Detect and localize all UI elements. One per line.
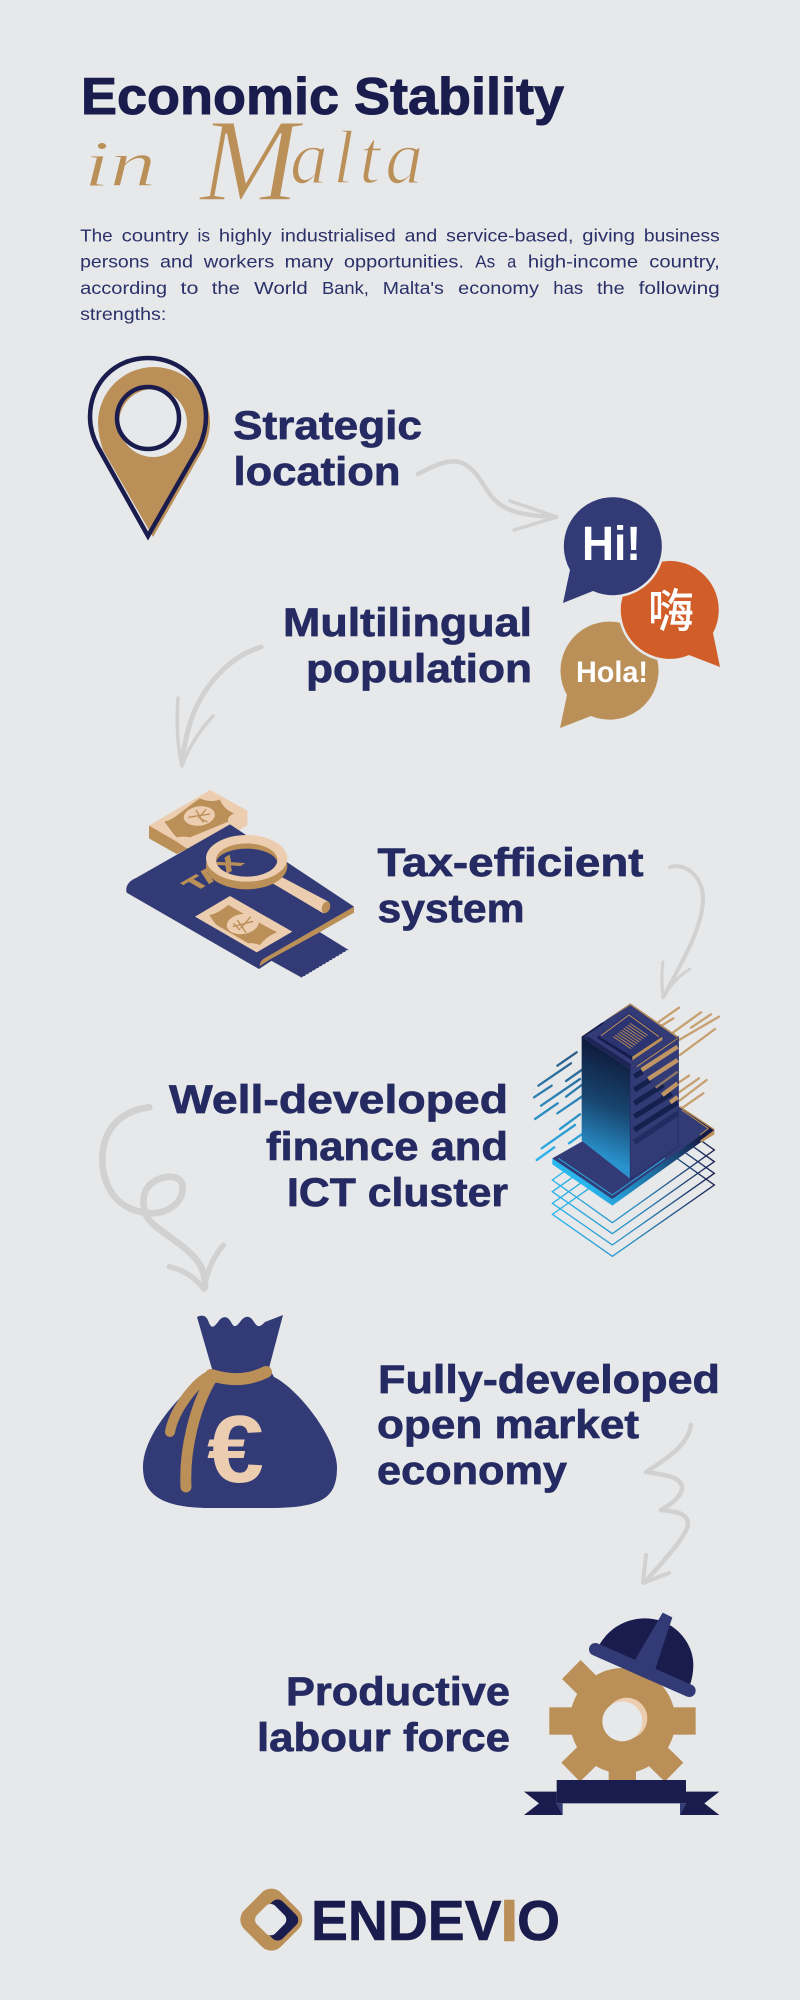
tower right face	[630, 1037, 678, 1179]
tower stripes	[634, 1072, 678, 1142]
base platform	[552, 1107, 714, 1206]
euro sign: €	[207, 1396, 264, 1503]
intro paragraph: and	[160, 252, 193, 272]
heading: Productive labour force: labour force	[257, 1716, 510, 1760]
subtitle: in Malta	[84, 95, 428, 226]
heading: Well-developed finance and ICT cluster: finance and	[266, 1125, 508, 1169]
intro paragraph: opportunities.	[344, 252, 464, 272]
bubble: Hi!	[563, 497, 662, 603]
heading: Fully-developed open market economy	[377, 1358, 720, 1493]
heading: Well-developed finance and ICT cluster	[169, 1078, 508, 1215]
intro paragraph: persons	[80, 252, 150, 272]
gold data streaks	[659, 1008, 719, 1108]
icon: server tower	[534, 1003, 719, 1256]
intro paragraph: according	[80, 278, 167, 298]
intro paragraph	[80, 226, 720, 324]
heading: Fully-developed open market economy: Fully-developed	[378, 1358, 720, 1402]
tower left face	[582, 1037, 630, 1179]
layered line diamonds	[552, 1107, 714, 1256]
heading: Strategic location: location	[234, 450, 400, 494]
heading: Multilingual population: Multilingual	[283, 601, 532, 645]
heading: Strategic location: Strategic	[233, 404, 422, 448]
intro paragraph: strengths:	[80, 304, 166, 324]
heading: Fully-developed open market economy: economy	[377, 1449, 568, 1493]
bubble: Hola!: Hola!	[576, 656, 648, 689]
tower top	[582, 1003, 678, 1069]
book spine	[260, 907, 354, 966]
intro paragraph: service-based,	[446, 226, 573, 246]
heading: Productive labour force	[257, 1670, 510, 1760]
gear	[549, 1660, 696, 1782]
TAX label: TAX	[177, 853, 249, 895]
heading: Productive labour force: Productive	[286, 1670, 510, 1714]
arrow: finance to market	[102, 1107, 223, 1289]
intro paragraph: highly	[219, 226, 272, 246]
intro paragraph: workers	[203, 252, 275, 272]
rope	[170, 1372, 266, 1487]
book	[126, 824, 354, 969]
intro paragraph: industrialised	[280, 226, 396, 246]
intro paragraph: has	[553, 278, 583, 298]
banknote on book	[195, 896, 292, 952]
bubble: 嗨: 嗨	[648, 585, 694, 637]
receipt	[270, 932, 349, 978]
icon: speech bubbles	[560, 497, 720, 728]
intro paragraph: a	[507, 252, 517, 272]
intro paragraph: business	[644, 226, 720, 246]
intro paragraph: the	[597, 278, 625, 298]
intro paragraph: World	[254, 278, 308, 298]
logo wordmark: ENDEVIO	[311, 1889, 560, 1953]
hard hat	[595, 1613, 693, 1691]
intro paragraph: following	[639, 278, 720, 298]
chip	[598, 1012, 662, 1060]
intro paragraph: to	[180, 278, 198, 298]
logo mark	[235, 1883, 308, 1956]
intro paragraph: is	[198, 226, 210, 246]
intro paragraph: country,	[649, 252, 720, 272]
bubble: Hola!	[560, 622, 659, 728]
icon: gear with hard hat	[524, 1613, 719, 1815]
subtitle: in Malta: alta	[290, 116, 428, 200]
icon: tax book, money and magnifier	[126, 790, 354, 978]
stacked banknote	[149, 790, 247, 854]
ribbon	[524, 1780, 719, 1815]
heading: Strategic location	[233, 404, 422, 494]
subtitle: in Malta: M	[198, 95, 304, 226]
heading: Tax-efficient system: system	[378, 887, 524, 931]
heading: Well-developed finance and ICT cluster: ICT cluster	[287, 1171, 508, 1215]
intro paragraph: Bank,	[322, 278, 369, 298]
heading: Well-developed finance and ICT cluster: Well-developed	[169, 1078, 508, 1122]
heading: Multilingual population: population	[306, 647, 532, 691]
intro paragraph: giving	[582, 226, 635, 246]
magnifier	[206, 835, 332, 914]
arrow: market to labour	[643, 1425, 691, 1583]
bag	[143, 1315, 337, 1508]
intro paragraph: many	[285, 252, 334, 272]
intro paragraph: economy	[458, 278, 539, 298]
icon: location pin	[90, 358, 210, 537]
intro paragraph: The	[80, 226, 113, 246]
bubble: Hi!: Hi!	[582, 518, 641, 571]
arrow: location to languages	[418, 461, 557, 530]
subtitle: in Malta: in	[84, 128, 156, 201]
title: Economic Stability	[81, 68, 564, 126]
icon: money bag	[143, 1315, 337, 1508]
heading: Multilingual population	[283, 601, 532, 691]
heading: Tax-efficient system	[378, 841, 644, 931]
intro paragraph: Malta's	[383, 278, 444, 298]
arrow: languages to tax	[177, 647, 261, 766]
heading: Fully-developed open market economy: open market	[377, 1403, 639, 1447]
blue data streaks	[534, 1052, 582, 1160]
logo: Endevio	[235, 1883, 560, 1956]
intro paragraph: high-income	[528, 252, 638, 272]
arrow: tax to finance	[662, 866, 703, 998]
intro paragraph: As	[475, 252, 495, 272]
bubble: 嗨	[621, 561, 720, 667]
intro paragraph: the	[212, 278, 240, 298]
heading: Tax-efficient system: Tax-efficient	[378, 841, 644, 885]
intro paragraph: and	[405, 226, 437, 246]
intro paragraph: country	[122, 226, 189, 246]
